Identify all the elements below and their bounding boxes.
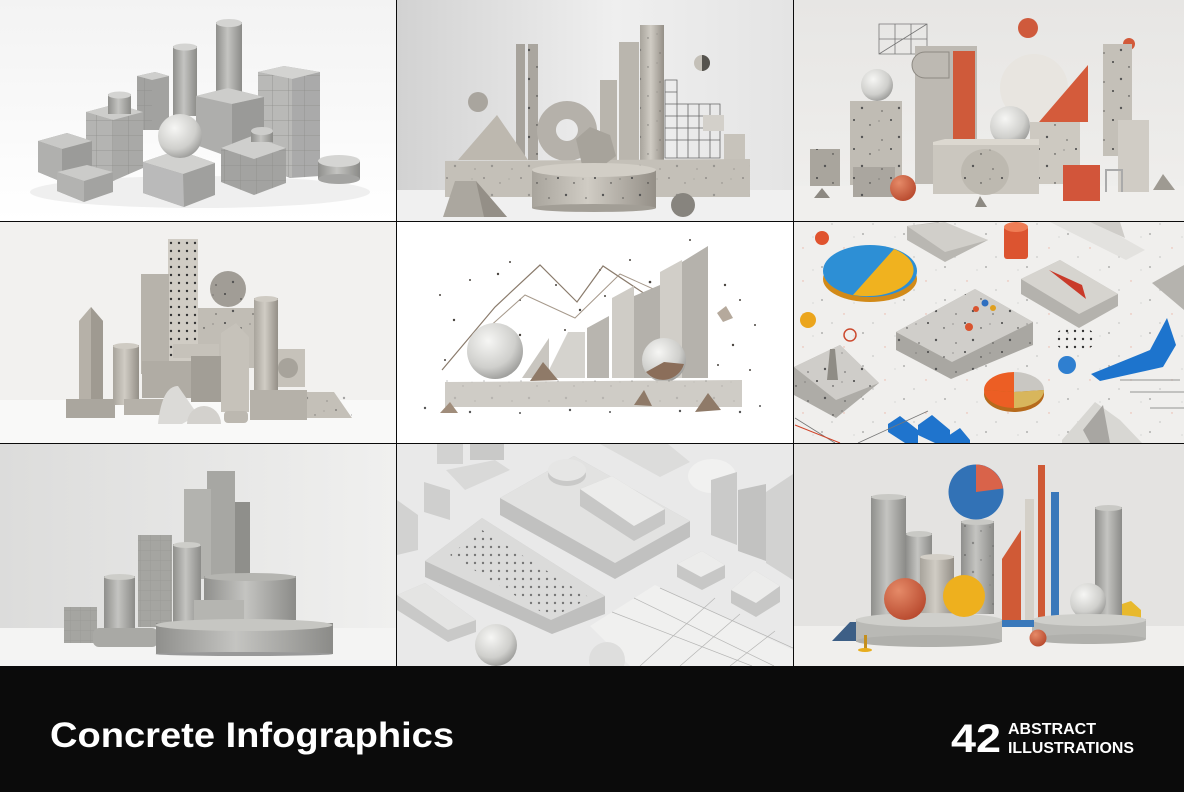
- count: 42 abstract illustrations: ABSTRACT: [1008, 721, 1097, 738]
- panel: white isometric blocks and tiles: [397, 444, 793, 678]
- title: Concrete Infographics: [50, 715, 454, 755]
- count: 42 abstract illustrations: 42: [951, 717, 1001, 761]
- panel: concrete bars with line chart and particles: [397, 222, 793, 443]
- panel: concrete shapes with red accents: [794, 0, 1184, 221]
- chart: blue and yellow pie: [823, 245, 917, 302]
- count: 42 abstract illustrations: [951, 717, 1134, 761]
- panel: tower, obelisk and sphere composition: [0, 222, 396, 443]
- panel: isometric colourful data blocks: [794, 222, 1184, 443]
- footer band: [0, 666, 1184, 792]
- count: 42 abstract illustrations: ILLUSTRATIONS: [1008, 740, 1134, 757]
- panel: grey skyline on round plinth: [0, 444, 396, 666]
- panel: stacked grey concrete blocks: [0, 0, 396, 221]
- panel: plinth with geometric concrete shapes: [397, 0, 793, 221]
- panel: columns with pie chart and coloured bars: [794, 444, 1184, 666]
